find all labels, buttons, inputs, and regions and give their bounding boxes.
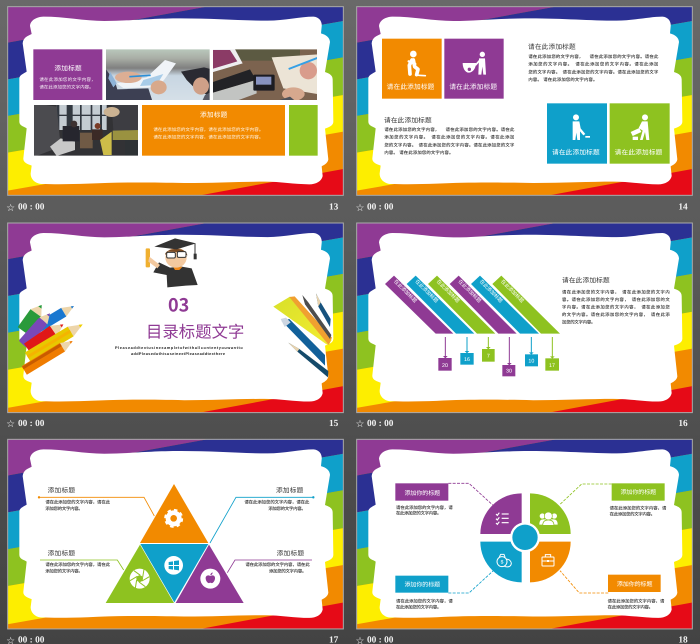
icon: money bags: $	[501, 559, 504, 565]
slide number: 16	[678, 418, 688, 428]
value 17	[545, 337, 559, 371]
green block	[289, 105, 318, 156]
slide 15 frame	[8, 223, 343, 413]
callout: purple: 添加你的标题	[404, 490, 440, 496]
callout: cyan: 在此添加您的文字内容。	[396, 604, 441, 609]
icon: adult with child	[573, 114, 590, 140]
photo: business hands with tablet	[104, 47, 212, 102]
text block: 容。请在此添加您的文字内容， 请在此添加您的文	[562, 297, 670, 302]
footer time	[356, 418, 393, 429]
triangle diagram	[106, 484, 244, 603]
callout: cyan: 添加你的标题	[404, 581, 440, 588]
value 20	[438, 337, 452, 371]
footer time: ☆	[7, 204, 15, 213]
text block: 请在此添加您的文字内容， 请在此添加您的文字内	[562, 290, 670, 295]
orange text card	[142, 105, 285, 156]
callout: purple	[395, 483, 493, 516]
callout: top right	[210, 487, 314, 543]
lower text block: 添加您的文字内容。 请在此添加您的文字内容。请在此添加	[384, 135, 514, 140]
footer time: ☆	[356, 420, 364, 429]
value 10: 10	[528, 358, 534, 364]
value 30	[502, 337, 515, 376]
text block: 字内容。请在此添加您的文字内容， 请在此添加您	[562, 305, 670, 310]
slide number: 14	[678, 202, 688, 212]
lower text block: 请在此添加您的文字内容， 请在此添加您的文字内容。请在此	[384, 127, 514, 132]
cyan tile	[547, 103, 607, 164]
panel: slide 14	[356, 7, 692, 213]
chapter title: 目录标题文字	[146, 323, 244, 341]
callout: top left: 请在此添加您的文字内容，请在此	[45, 499, 110, 504]
callout: green	[559, 483, 666, 517]
purple text card: 请在此添加您的文字内容，	[39, 77, 96, 82]
callout: lower left	[40, 550, 124, 574]
callout: lower left: 添加您的文字内容。	[45, 569, 83, 574]
callout: cyan	[395, 571, 493, 609]
value 16	[460, 337, 474, 365]
orange text card: 请在此添加您的文字内容，请在此添加您的文字内容。	[153, 127, 263, 132]
illustration: ruler and pens	[273, 293, 332, 377]
icon: team	[539, 512, 558, 525]
orange text card: 添加标题	[200, 111, 227, 119]
chapter subtitle	[115, 346, 243, 356]
value 7	[482, 337, 495, 362]
purple text card: 添加标题	[54, 65, 82, 72]
value 16: 16	[464, 357, 470, 362]
cyan tile: 请在此添加标题	[552, 149, 600, 156]
diagonal bands: 在此添加标题	[414, 279, 439, 304]
icon: man digging	[409, 51, 425, 76]
panel: slide 13	[7, 7, 343, 213]
icon: windows	[164, 556, 183, 575]
upper text block: 您的文字内容。 请在此添加您的文字内容。请在此添加您的文字	[528, 69, 658, 74]
callout: cyan: 请在此添加您的文字内容，请	[396, 599, 453, 604]
icon: gear	[166, 510, 182, 526]
lower text block	[384, 117, 514, 155]
slide 16 frame	[357, 223, 692, 413]
diagonal bands: 在此添加标题	[393, 279, 418, 304]
purple tile	[444, 39, 504, 99]
illustration: graduate	[146, 238, 198, 287]
callout: lower right: 添加您的文字内容。	[269, 569, 306, 574]
upper text block: 内容。 请在此添加您的文字内容。	[528, 77, 597, 82]
value 17: 17	[549, 363, 555, 368]
value 30: 30	[506, 368, 512, 374]
upper text block: 添加您的文字内容。 请在此添加您的文字内容。请在此添加	[528, 62, 658, 67]
callout: lower left: 添加标题	[48, 550, 75, 557]
callout: green: 在此添加您的文字内容。	[610, 512, 655, 517]
quadrant wheel	[480, 493, 571, 582]
slide 17 frame	[8, 439, 343, 629]
footer time	[7, 634, 44, 644]
slide number: 13	[329, 202, 338, 212]
lower text block: 请在此添加标题	[384, 117, 432, 124]
callout: lower left: 请在此添加您的文字内容，请在此	[45, 562, 110, 567]
callout: orange: 添加你的标题	[617, 581, 652, 587]
illustration: coloured pencils	[18, 301, 86, 375]
footer time: 00 : 00	[367, 202, 393, 212]
footer time: 00 : 00	[367, 418, 393, 428]
panel: slide 16	[356, 223, 692, 429]
footer time: ☆	[356, 204, 364, 213]
callout: lower right	[227, 550, 312, 574]
icon: briefcase	[542, 555, 554, 566]
callout: purple: 请在此添加您的文字内容，请	[396, 505, 453, 510]
text block: 的文字内容。请在此添加您的文字内容， 请在此添	[562, 312, 670, 317]
callout: lower right: 请在此添加您的文字内容，请在此	[245, 562, 310, 567]
photo: meeting lounge	[34, 105, 138, 156]
callout: top left: 添加标题	[48, 487, 75, 494]
green tile: 请在此添加标题	[615, 149, 662, 156]
purple text card	[33, 49, 102, 100]
callout: orange: 在此添加您的文字内容。	[608, 604, 653, 609]
callout: top left: 添加您的文字内容。	[45, 506, 83, 511]
chapter number: 03	[168, 291, 189, 317]
callout: green: 请在此添加您的文字内容，请	[610, 506, 666, 511]
upper text block: 请在此添加标题	[528, 43, 576, 51]
orange tile	[382, 39, 442, 99]
callout: green: 添加你的标题	[620, 489, 656, 495]
slide 14 frame	[357, 7, 692, 195]
panel: slide 18	[356, 439, 692, 644]
text block	[562, 277, 670, 325]
callout: top right: 添加标题	[276, 487, 303, 494]
photo: laptop and notebook	[213, 49, 317, 100]
icon: apple	[200, 569, 220, 589]
slide 13 frame	[8, 7, 343, 195]
icon: worker with wheelbarrow	[463, 52, 486, 75]
purple tile: 请在此添加标题	[449, 83, 497, 91]
slide number: 15	[329, 418, 338, 428]
icon: checklist	[496, 513, 509, 524]
panel: slide 15	[7, 223, 343, 429]
footer time: 00 : 00	[18, 202, 44, 212]
value 7: 7	[487, 353, 490, 359]
callout: top right: 请在此添加您的文字内容，请在此	[244, 499, 309, 504]
callout: lower right: 添加标题	[277, 550, 304, 557]
callout: top left	[38, 487, 154, 516]
diagonal bands: 在此添加标题	[435, 279, 461, 304]
text block: 请在此添加标题	[562, 277, 610, 284]
green tile	[610, 103, 670, 164]
purple text card: 请在此添加您的文字内容。	[39, 84, 94, 89]
value 20: 20	[442, 363, 448, 368]
diagonal bands	[385, 276, 560, 334]
lower text block: 您的文字内容。 请在此添加您的文字内容。请在此添加您的文字	[384, 142, 514, 147]
diagonal bands: 在此添加标题	[500, 279, 525, 304]
text block: 加您的文字内容。	[562, 320, 595, 325]
footer time	[7, 202, 44, 213]
diagonal bands: 在此添加标题	[457, 279, 482, 304]
lower text block: 内容。 请在此添加您的文字内容。	[384, 150, 453, 155]
footer time	[356, 202, 393, 213]
icon: aperture	[130, 569, 150, 589]
callout: orange: 请在此添加您的文字内容，请	[608, 599, 664, 604]
callout: orange	[560, 571, 664, 609]
chapter subtitle: addPleasedothisuseinextPleaseaddtexthere	[131, 352, 225, 356]
icon: worker with cart	[631, 114, 649, 140]
slide 18 frame	[357, 439, 692, 629]
footer time: 00 : 00	[18, 418, 44, 428]
upper text block: 请在此添加您的文字内容， 请在此添加您的文字内容。请在此	[528, 54, 658, 59]
callout: purple: 在此添加您的文字内容。	[396, 511, 441, 516]
orange tile: 请在此添加标题	[387, 83, 434, 91]
value 10	[525, 337, 538, 366]
panel: slide 17	[7, 439, 343, 644]
footer time: ☆	[7, 420, 15, 429]
upper text block	[528, 43, 658, 82]
orange text card: 请在此添加您的文字内容，请在此添加您的文字内容。	[153, 135, 263, 140]
diagonal bands: 在此添加标题	[478, 279, 504, 304]
chapter subtitle: Pleaseaddtextusinexampletofwithallcontentyouwantto	[115, 346, 243, 350]
footer time	[7, 418, 44, 429]
callout: top right: 添加您的文字内容。	[268, 506, 306, 511]
